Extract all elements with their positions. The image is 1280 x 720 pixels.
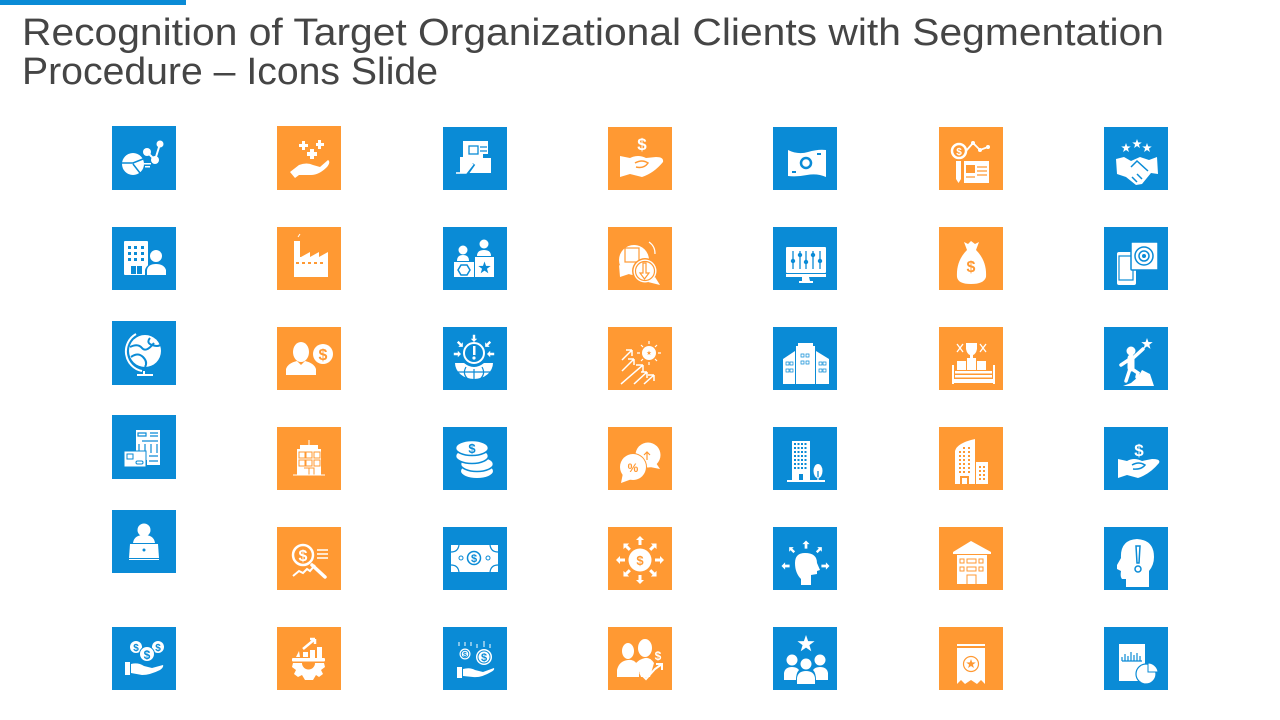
- icon: hand with three coins: $: [155, 643, 161, 654]
- icon: hand with plus signs: [277, 126, 341, 190]
- top accent bar: [0, 0, 186, 5]
- icon: hand with dollar: [1104, 427, 1168, 490]
- icon: hand with dollar: $: [1134, 441, 1144, 460]
- icon: dollar with outward arrows: $: [636, 553, 644, 568]
- icon: person at laptop: [112, 510, 176, 573]
- icon: banknote: [773, 127, 837, 190]
- icon: machine with documents: [443, 127, 507, 190]
- icon: money bag: [939, 227, 1003, 290]
- icon: report with pie chart: [1104, 627, 1168, 690]
- icon: businessman with dollar coin: [277, 327, 341, 390]
- icon: magnifier with dollar and trend: $: [299, 548, 308, 565]
- icon: globe with alert and arrows: [443, 327, 507, 390]
- icon: coin pencil and report: $: [956, 147, 962, 158]
- icon: hotel building: [277, 427, 341, 490]
- icon: person climbing to star: [1104, 327, 1168, 390]
- icon: ribbon ticket with star: [939, 627, 1003, 690]
- icon: hand receiving dollar: $: [637, 135, 647, 154]
- icon: documents and cards: [112, 415, 176, 479]
- icon: house building: [939, 527, 1003, 590]
- icon: city towers: [939, 427, 1003, 490]
- icon: head with radiating arrows: [773, 527, 837, 590]
- icon: speech bubbles with percent and up arrow: [608, 427, 672, 490]
- icon: hand with three coins: $: [133, 643, 139, 654]
- icon: stack of dollar coins: [443, 427, 507, 490]
- title: [22, 12, 1164, 93]
- icon: hand with falling coins: $: [463, 652, 467, 659]
- icon: hand with falling coins: $: [481, 652, 487, 664]
- icon: hand with three coins: [112, 627, 176, 690]
- icon: speech bubbles with discount arrow: [608, 227, 672, 290]
- icon: business people with dollar trend: $: [655, 649, 662, 663]
- icon: businessman with dollar coin: $: [319, 347, 328, 364]
- icon: hand receiving dollar: [608, 127, 672, 190]
- icon: rising arrows with sun badge: [608, 327, 672, 390]
- icon: team with star: [773, 627, 837, 690]
- icon: office campus building: [773, 327, 837, 390]
- icon: tower with tree: [773, 427, 837, 490]
- icon: business people with dollar trend: [608, 627, 672, 690]
- icon: gear with growth chart: [277, 627, 341, 690]
- icon: mobile and gear settings: [1104, 227, 1168, 290]
- icon: trophy on winners podium: [939, 327, 1003, 390]
- icon: money bag: $: [967, 259, 976, 276]
- icon: handshake with stars: [1104, 127, 1168, 190]
- icon: head with exclamation mark: [1104, 527, 1168, 590]
- icon: speech bubbles with percent and up arrow: %: [628, 461, 639, 475]
- icon: banknote with dollar seal: $: [471, 553, 477, 565]
- icon: banknote with dollar seal: [443, 527, 507, 590]
- icon: factory: [277, 227, 341, 290]
- icon: office building and person: [112, 227, 176, 290]
- icon: hand with three coins: $: [144, 648, 151, 662]
- icon: two people behind product stands: [443, 227, 507, 290]
- icon: stack of dollar coins: $: [468, 441, 476, 456]
- icon: globe on stand: [112, 321, 176, 385]
- icon: hand with falling coins: [443, 627, 507, 690]
- title: Procedure – Icons Slide: [22, 51, 438, 93]
- icon: pie chart with line graph: [112, 126, 176, 190]
- icon: magnifier with dollar and trend: [277, 527, 341, 590]
- icon: dollar with outward arrows: [608, 527, 672, 590]
- title: Recognition of Target Organizational Clients with Segmentation: [22, 12, 1164, 54]
- icon: coin pencil and report: [939, 127, 1003, 190]
- icon: monitor with sliders: [773, 227, 837, 290]
